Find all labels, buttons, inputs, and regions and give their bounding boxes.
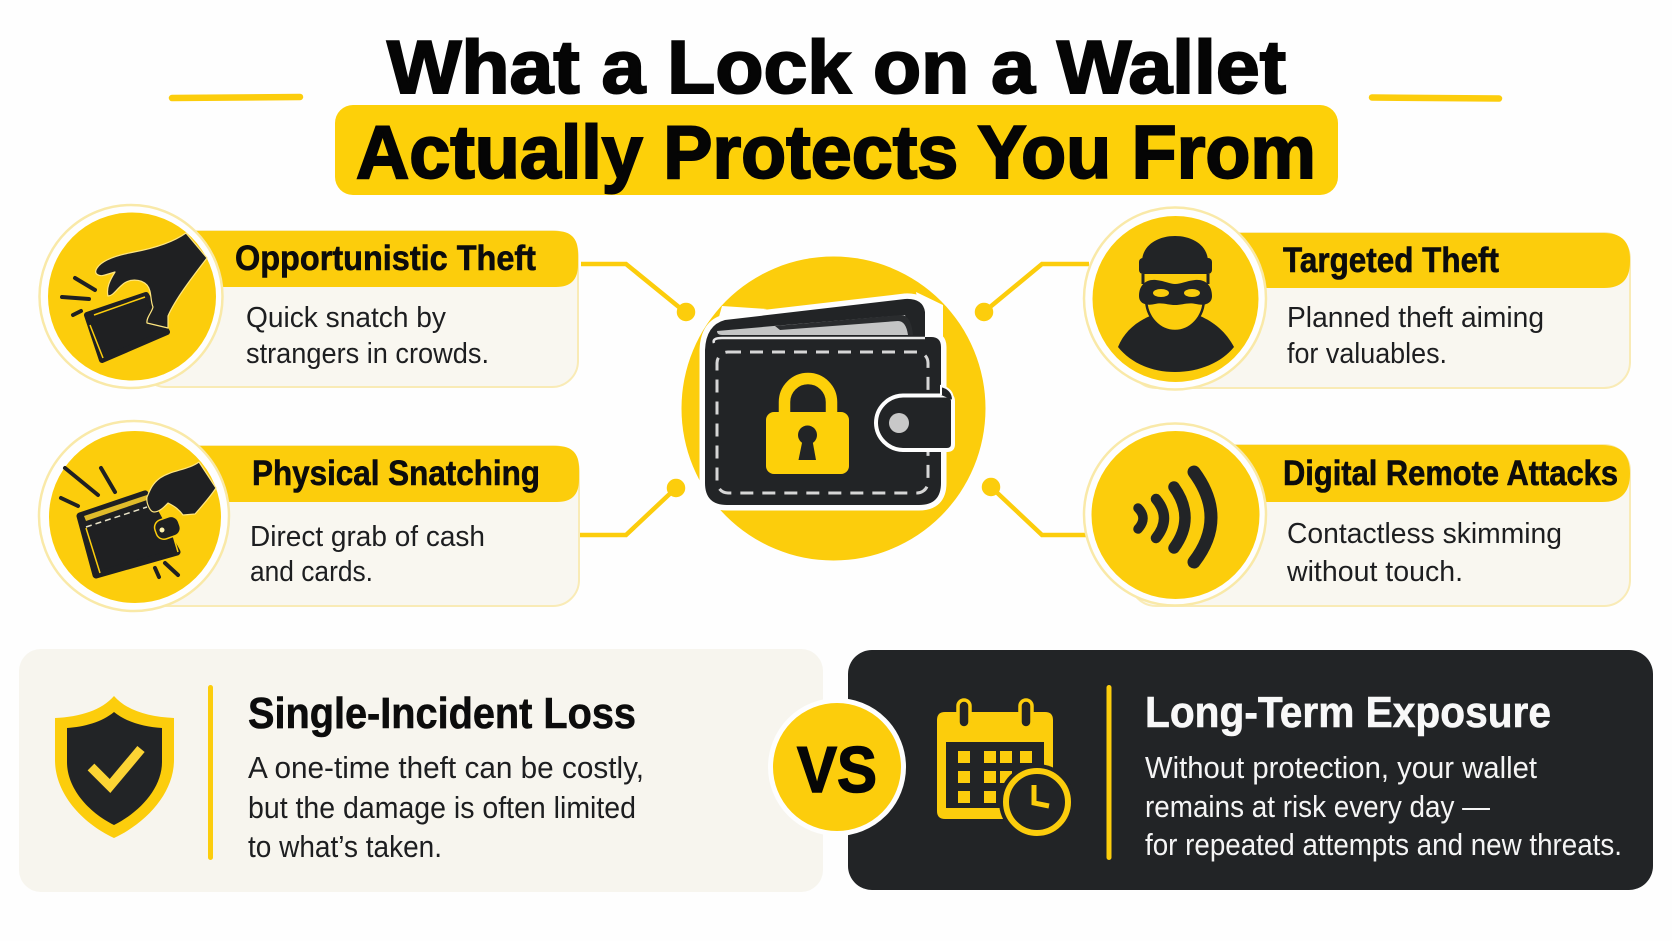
panel: single-incident loss <box>19 649 823 892</box>
heading: opportunistic theft: Opportunistic Theft <box>235 239 536 278</box>
panel: physical snatching <box>39 421 579 611</box>
description: single-incident loss: to what’s taken. <box>248 829 442 864</box>
icon: masked thief <box>1084 208 1266 390</box>
connector lines <box>580 264 1089 535</box>
description: long-term exposure: Without protection, your wallet <box>1145 750 1537 785</box>
icon: hand taking wallet <box>40 205 222 388</box>
description: targeted theft: for valuables. <box>1287 338 1447 370</box>
title: Actually Protects You From <box>356 110 1316 194</box>
icon: contactless waves <box>1084 424 1266 606</box>
title <box>172 25 1499 195</box>
heading: long-term exposure: Long-Term Exposure <box>1145 688 1551 737</box>
description: opportunistic theft: strangers in crowds. <box>246 338 489 370</box>
title: What a Lock on a Wallet <box>387 25 1286 109</box>
heading: physical snatching: Physical Snatching <box>252 454 540 493</box>
panel: opportunistic theft <box>40 205 578 388</box>
description: digital remote attacks: without touch. <box>1286 556 1463 588</box>
icon: shield with check <box>55 696 174 838</box>
description: digital remote attacks: Contactless skimming <box>1287 518 1562 550</box>
description: single-incident loss: A one-time theft can be costly, <box>248 750 644 785</box>
vs badge: VS <box>797 733 877 806</box>
description: single-incident loss: but the damage is often limited <box>248 790 636 825</box>
description: physical snatching: Direct grab of cash <box>250 521 485 553</box>
heading: digital remote attacks: Digital Remote Attacks <box>1283 454 1618 493</box>
central wallet with lock <box>682 256 986 560</box>
panel: long-term exposure <box>848 650 1653 890</box>
description: targeted theft: Planned theft aiming <box>1287 302 1544 334</box>
panel: targeted theft <box>1084 208 1630 390</box>
description: opportunistic theft: Quick snatch by <box>246 302 446 334</box>
description: long-term exposure: for repeated attempts and new threats. <box>1145 827 1622 862</box>
heading: single-incident loss: Single-Incident Loss <box>248 689 636 738</box>
panel: digital remote attacks <box>1084 424 1630 606</box>
icon: calendar with clock <box>937 700 1075 840</box>
description: long-term exposure: remains at risk every day — <box>1145 789 1490 824</box>
description: physical snatching: and cards. <box>250 556 373 588</box>
icon: hand grabbing wallet <box>39 421 229 611</box>
heading: targeted theft: Targeted Theft <box>1283 241 1499 280</box>
vs badge <box>770 700 904 834</box>
